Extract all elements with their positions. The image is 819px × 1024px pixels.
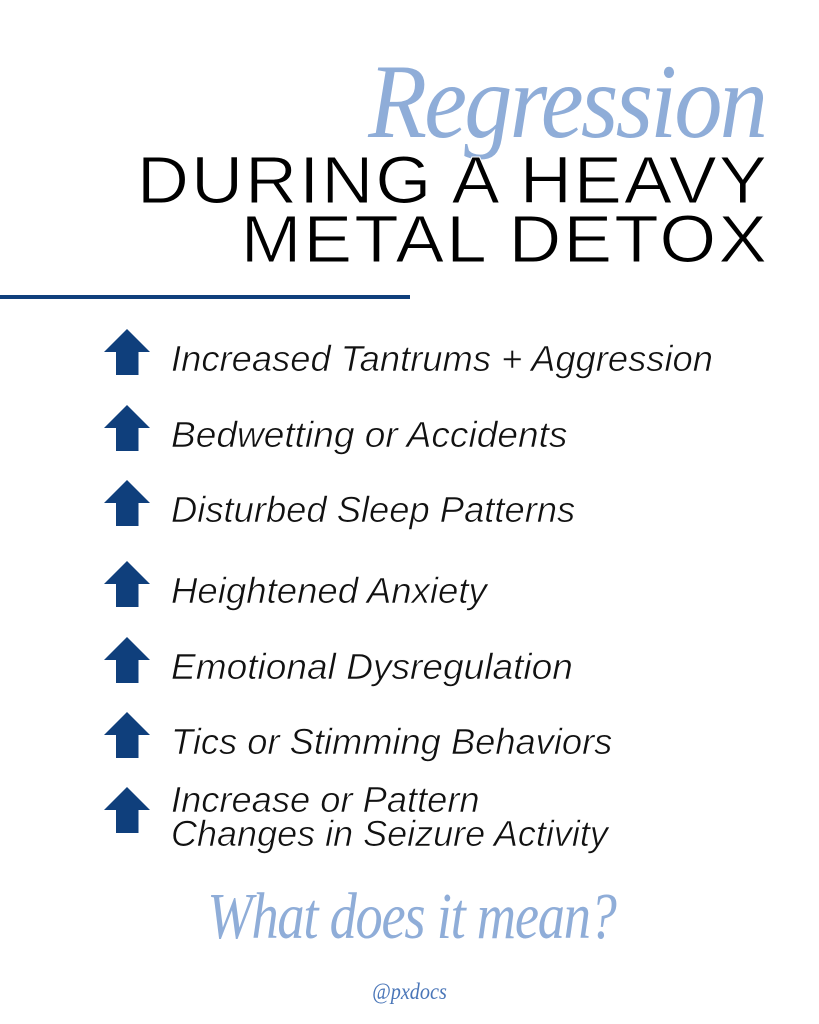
- list item 4: Heightened Anxiety: [171, 570, 487, 611]
- divider line: [0, 295, 410, 299]
- icon: arrow 5: [104, 637, 150, 683]
- list item 2: Bedwetting or Accidents: [171, 414, 567, 455]
- icon: arrow 2: [104, 405, 150, 451]
- list item 7: [171, 779, 610, 854]
- list item 1: Increased Tantrums + Aggression: [171, 338, 713, 379]
- icon: arrow 4: [104, 561, 150, 607]
- heading: during a heavy metal detox: DURING A HEAVY: [137, 143, 769, 218]
- icon: arrow 1: [104, 329, 150, 375]
- title: Regression: Regression: [368, 43, 765, 160]
- list item 7: Changes in Seizure Activity: [171, 813, 608, 854]
- icon: arrow 3: [104, 480, 150, 526]
- list item 5: Emotional Dysregulation: [171, 646, 573, 687]
- closing question: What does it mean?: [207, 880, 615, 953]
- list item 7: Increase or Pattern: [171, 779, 480, 820]
- heading line 2: METAL DETOX: [241, 202, 769, 277]
- handle: @pxdocs: [372, 979, 447, 1004]
- list item 3: Disturbed Sleep Patterns: [171, 489, 575, 530]
- icon: arrow 6: [104, 712, 150, 758]
- list item 6: Tics or Stimming Behaviors: [171, 721, 612, 762]
- icon: arrow 7: [104, 787, 150, 833]
